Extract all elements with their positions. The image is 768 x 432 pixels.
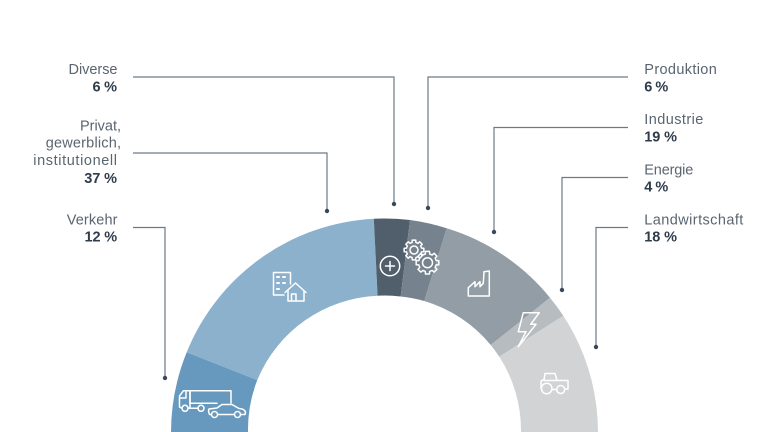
label: Industrie: Industrie [644, 112, 703, 128]
segment: Produktion 6% [401, 220, 447, 301]
label: Landwirtschaft: Landwirtschaft [644, 212, 743, 228]
leader line: Diverse [133, 77, 396, 206]
icon: factory [468, 271, 489, 296]
gear large [416, 251, 439, 274]
leader line: Verkehr [133, 228, 167, 380]
label: Produktion: 6 % [644, 80, 668, 96]
label: Industrie [644, 112, 703, 146]
segment: Verkehr 12% [171, 352, 257, 432]
label: Privat, gewerblich, institutionell: institutionell [33, 153, 117, 169]
leader line: Landwirtschaft [594, 228, 628, 349]
label: Produktion: Produktion [644, 62, 717, 78]
leader line: Industrie [492, 128, 628, 234]
segment: Landwirtschaft 18% [499, 316, 598, 432]
label: Verkehr: 12 % [84, 230, 117, 246]
segment: Privat 37% [187, 219, 378, 380]
label: Energie [644, 162, 693, 195]
label: Privat, gewerblich, institutionell: gewerblich, [46, 136, 121, 152]
segment: Energie 4% [491, 298, 563, 357]
leader line: Energie [560, 178, 628, 292]
icon: truck and car [180, 391, 246, 418]
icon: office building and house [274, 272, 306, 301]
label: Diverse: 6 % [92, 80, 117, 96]
segment: Industrie 19% [424, 228, 550, 345]
gear small [404, 240, 424, 260]
icon: two gears [404, 240, 439, 274]
label: Diverse: Diverse [68, 62, 118, 78]
label: Industrie: 19 % [644, 130, 677, 146]
label: Verkehr [67, 212, 118, 246]
label: Energie: 4 % [644, 179, 668, 195]
label: Landwirtschaft: 18 % [644, 230, 677, 246]
label: Landwirtschaft [644, 212, 743, 246]
segment: Diverse 6% [374, 219, 410, 296]
leader line: Privat [133, 153, 329, 213]
leader line: Produktion [426, 77, 628, 210]
label: Produktion [644, 62, 717, 96]
label: Privat, gewerblich, institutionell: 37 % [84, 171, 117, 187]
icon: tractor [541, 374, 568, 394]
label: Diverse [68, 62, 118, 96]
icon: plus in circle [380, 256, 400, 276]
label: Privat, gewerblich, institutionell [33, 118, 121, 187]
semicircle donut chart [171, 219, 598, 432]
label: Energie: Energie [644, 162, 693, 178]
label: Privat, gewerblich, institutionell: Privat, [80, 118, 121, 134]
label: Verkehr: Verkehr [67, 212, 118, 228]
icon: lightning bolt [518, 313, 539, 347]
